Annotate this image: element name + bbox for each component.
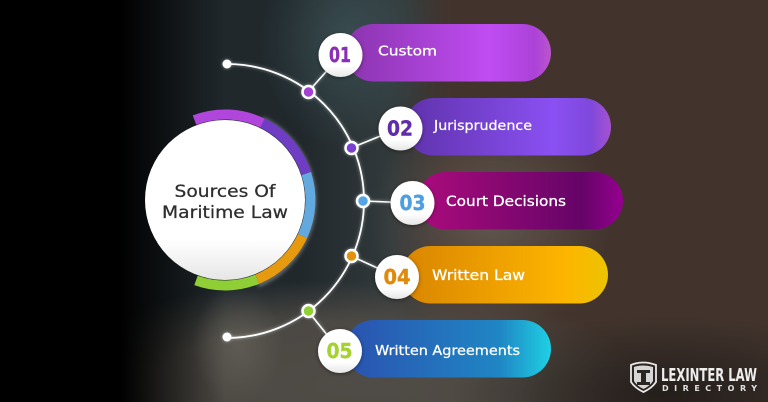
central ring and circle bbox=[145, 114, 314, 286]
pill 02 bbox=[405, 98, 611, 156]
number 01: 01 bbox=[329, 43, 351, 67]
item 05 bbox=[318, 320, 551, 378]
label 05: Written Agreements bbox=[375, 344, 520, 359]
center title bbox=[162, 182, 288, 222]
icon: shield with pillar bbox=[631, 362, 656, 392]
number 04: 04 bbox=[384, 265, 410, 289]
item 02 bbox=[378, 98, 611, 156]
label 01: Custom bbox=[378, 44, 437, 60]
item 03 bbox=[390, 172, 623, 230]
badge 02 bbox=[378, 106, 422, 150]
label 03: Court Decisions bbox=[446, 194, 566, 210]
center title: Maritime Law bbox=[162, 203, 288, 222]
pill 05 bbox=[345, 320, 551, 378]
pill 01 bbox=[345, 24, 551, 82]
ring segments bbox=[194, 114, 310, 286]
connector lines bbox=[308, 55, 413, 351]
badge 05 bbox=[318, 329, 362, 373]
arc node dots bbox=[302, 86, 369, 317]
pill 04 bbox=[402, 246, 608, 304]
center title: Sources Of bbox=[174, 182, 277, 201]
pill 03 bbox=[417, 172, 623, 230]
badge 04 bbox=[375, 255, 419, 299]
number 05: 05 bbox=[326, 339, 352, 363]
logo subtitle: DIRECTORY bbox=[662, 384, 757, 393]
number 03: 03 bbox=[400, 191, 426, 215]
connector arc bbox=[227, 55, 413, 351]
logo bbox=[631, 362, 757, 393]
label 02: Jurisprudence bbox=[433, 119, 532, 134]
badge 01 bbox=[318, 33, 362, 77]
arc end dots bbox=[222, 60, 232, 342]
label 04: Written Law bbox=[432, 268, 525, 284]
badge 03 bbox=[390, 181, 434, 225]
item 04 bbox=[375, 246, 608, 304]
white circle bbox=[145, 120, 305, 280]
number 02: 02 bbox=[387, 116, 413, 140]
item 01 bbox=[318, 24, 551, 82]
